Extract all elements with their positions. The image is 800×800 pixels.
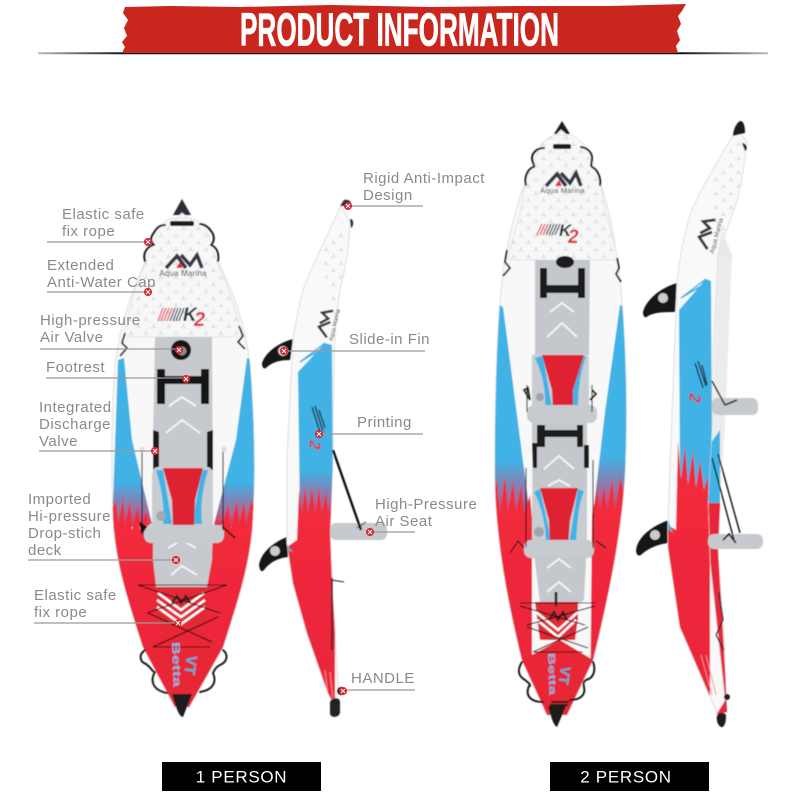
label: elastic safe fix rope (rear): fix rope (34, 604, 87, 621)
title banner: PRODUCT INFORMATION (240, 4, 559, 56)
deck logo: Aqua Marina (159, 269, 207, 278)
label: imported hi-pressure drop-stich deck: Hi-pressure (28, 508, 111, 525)
label: footrest (46, 359, 190, 383)
kayak: 1 person top view: VT (180, 654, 200, 676)
deck logo: Aqua Marina (540, 186, 585, 195)
label: rigid anti-impact design: Design (363, 187, 413, 204)
side logo: Aqua Marina (709, 217, 725, 254)
label: integrated discharge valve: Integrated (39, 399, 112, 416)
side logo (696, 214, 725, 254)
label: imported hi-pressure drop-stich deck: Imported (28, 491, 91, 508)
K2 logo (537, 221, 579, 248)
label: high-pressure air seat: High-Pressure (375, 496, 477, 513)
label: high-pressure air valve: Air Valve (40, 329, 103, 346)
deck logo (159, 255, 207, 278)
K2 logo: K (183, 305, 198, 326)
label: extended anti-water cap: Anti-Water Cap (47, 274, 156, 291)
front grab loops (525, 147, 600, 185)
rear storage box (535, 602, 578, 640)
title banner (38, 4, 768, 56)
fins (262, 339, 293, 368)
kayak: 1 person top view (105, 199, 262, 725)
kayak: 2 person side view (636, 121, 763, 730)
front grab loops (144, 224, 218, 261)
label: elastic safe fix rope (front) (47, 206, 152, 246)
rear seat (532, 488, 587, 550)
label: elastic safe fix rope (rear) (34, 587, 182, 626)
caption: 1 person: 1 PERSON (196, 768, 287, 786)
K2 logo: 2 (193, 309, 205, 331)
stern lettering: Betta (545, 653, 557, 696)
label: printing: Printing (357, 414, 412, 431)
label: rigid anti-impact design: Rigid Anti-Impact (363, 170, 485, 187)
fins (643, 283, 677, 317)
rear grab loops (141, 650, 227, 693)
label: printing (315, 414, 423, 438)
caption: 1 person (162, 762, 321, 791)
label: integrated discharge valve (39, 399, 159, 455)
front seat (532, 353, 589, 414)
label: high-pressure air seat: Air Seat (375, 513, 433, 530)
deck logo (540, 173, 585, 195)
label: extended anti-water cap: Extended (47, 257, 114, 274)
rear storage box (155, 587, 207, 627)
kayak: 2 person side view: 2 (685, 392, 703, 403)
second hull tube (710, 255, 732, 715)
bungee cords (138, 585, 227, 647)
label: slide-in fin (280, 331, 430, 355)
label: footrest: Footrest (46, 359, 105, 376)
label: integrated discharge valve: Discharge (39, 416, 111, 433)
label: imported hi-pressure drop-stich deck: deck (28, 542, 62, 559)
caption: 2 person (550, 762, 709, 791)
label: elastic safe fix rope (rear): Elastic safe (34, 587, 117, 604)
label: elastic safe fix rope (front): fix rope (62, 223, 115, 240)
rear grab loops (519, 662, 594, 702)
air seat (330, 523, 387, 540)
K2 logo: 2 (567, 227, 579, 248)
label: slide-in fin: Slide-in Fin (349, 331, 430, 348)
K2 logo (158, 305, 205, 331)
label: high-pressure air valve: High-pressure (40, 312, 141, 329)
side logo (316, 305, 342, 342)
label: high-pressure air seat (366, 496, 477, 536)
kayak: 1 person side view: 2 (305, 439, 323, 450)
label: handle (339, 670, 415, 695)
footrest (157, 369, 209, 404)
air valve (171, 340, 191, 360)
kayak: 2 person top view (490, 121, 630, 727)
footrests (540, 268, 585, 298)
label: handle: HANDLE (351, 670, 415, 687)
kayak: 2 person top view: VT (555, 666, 574, 686)
label: integrated discharge valve: Valve (39, 433, 78, 450)
side logo: Aqua Marina (329, 308, 342, 342)
label: imported hi-pressure drop-stich deck (28, 491, 180, 564)
label: elastic safe fix rope (front): Elastic safe (62, 206, 145, 223)
seat (152, 467, 213, 530)
K2 logo: K (559, 221, 573, 240)
label: rigid anti-impact design (344, 170, 485, 210)
air seats (712, 398, 758, 415)
caption: 2 person: 2 PERSON (580, 768, 672, 786)
label: imported hi-pressure drop-stich deck: Drop-stich (28, 525, 101, 542)
bungee cords (520, 603, 595, 652)
label: extended anti-water cap (47, 257, 156, 296)
kayak: 1 person side view (259, 200, 387, 725)
stern lettering: Betta (169, 642, 183, 689)
label: high-pressure air valve (40, 312, 183, 354)
